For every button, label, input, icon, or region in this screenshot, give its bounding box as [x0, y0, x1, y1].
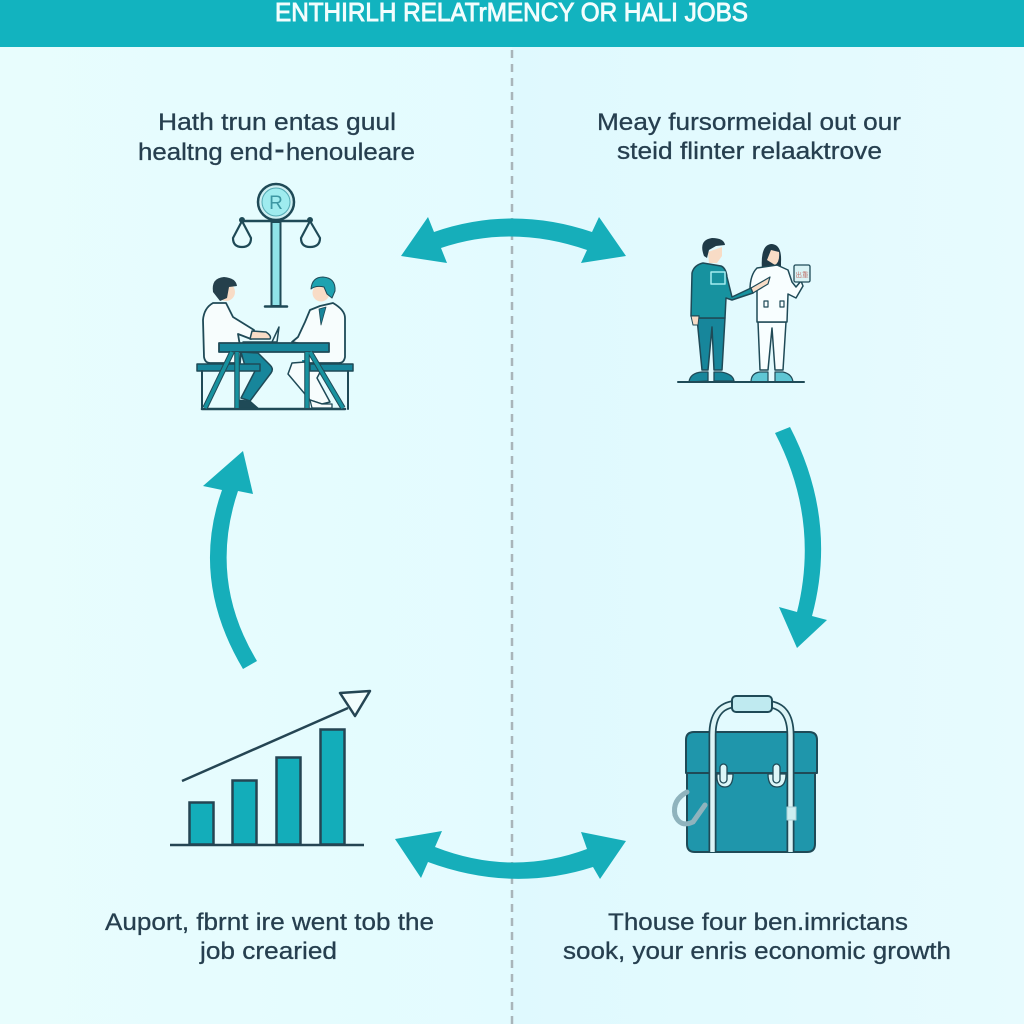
seated person left	[203, 277, 279, 408]
text block: bottom right: sook, your enris economic growth	[563, 938, 951, 965]
icon: scales and two seated professionals	[197, 184, 353, 409]
arrow: top double-headed	[401, 217, 626, 263]
woman in white coat: 出重	[796, 270, 809, 279]
text block: top right: steid flinter relaaktrove	[617, 138, 882, 165]
text block: top right: Meay fursormeidal out our	[597, 109, 901, 136]
text block: top left: Hath trun entas guul	[158, 109, 396, 136]
header band	[0, 0, 1024, 47]
text block: bottom right: Thouse four ben.imrictans	[608, 909, 908, 936]
text block: bottom left: job crearied	[199, 938, 337, 965]
arrow: bottom double-headed	[395, 831, 626, 879]
man in teal scrubs	[689, 238, 770, 382]
icon: medical bag	[674, 696, 817, 852]
table and benches	[197, 343, 353, 409]
arrow: left curved up	[203, 451, 257, 669]
woman in white coat	[750, 244, 810, 382]
bag body	[686, 732, 817, 852]
text block: top left	[138, 109, 415, 166]
text block: bottom left: Auport, fbrnt ire went tob the	[105, 909, 434, 936]
buckles	[717, 764, 786, 787]
seated person right	[288, 277, 345, 408]
arrow: right curved down	[775, 427, 827, 648]
text block: top right	[597, 109, 901, 165]
handle	[712, 696, 796, 852]
bar chart with trend arrow	[170, 691, 370, 845]
text block: bottom left	[105, 909, 434, 965]
trend arrow	[182, 691, 370, 781]
scales: R	[269, 193, 283, 214]
scales	[233, 184, 320, 306]
hanging tube	[674, 792, 705, 824]
icon: two healthcare workers standing	[678, 238, 810, 382]
text block: bottom right	[563, 909, 951, 965]
text block: top left: healtng end⁃henouleare	[138, 139, 415, 166]
